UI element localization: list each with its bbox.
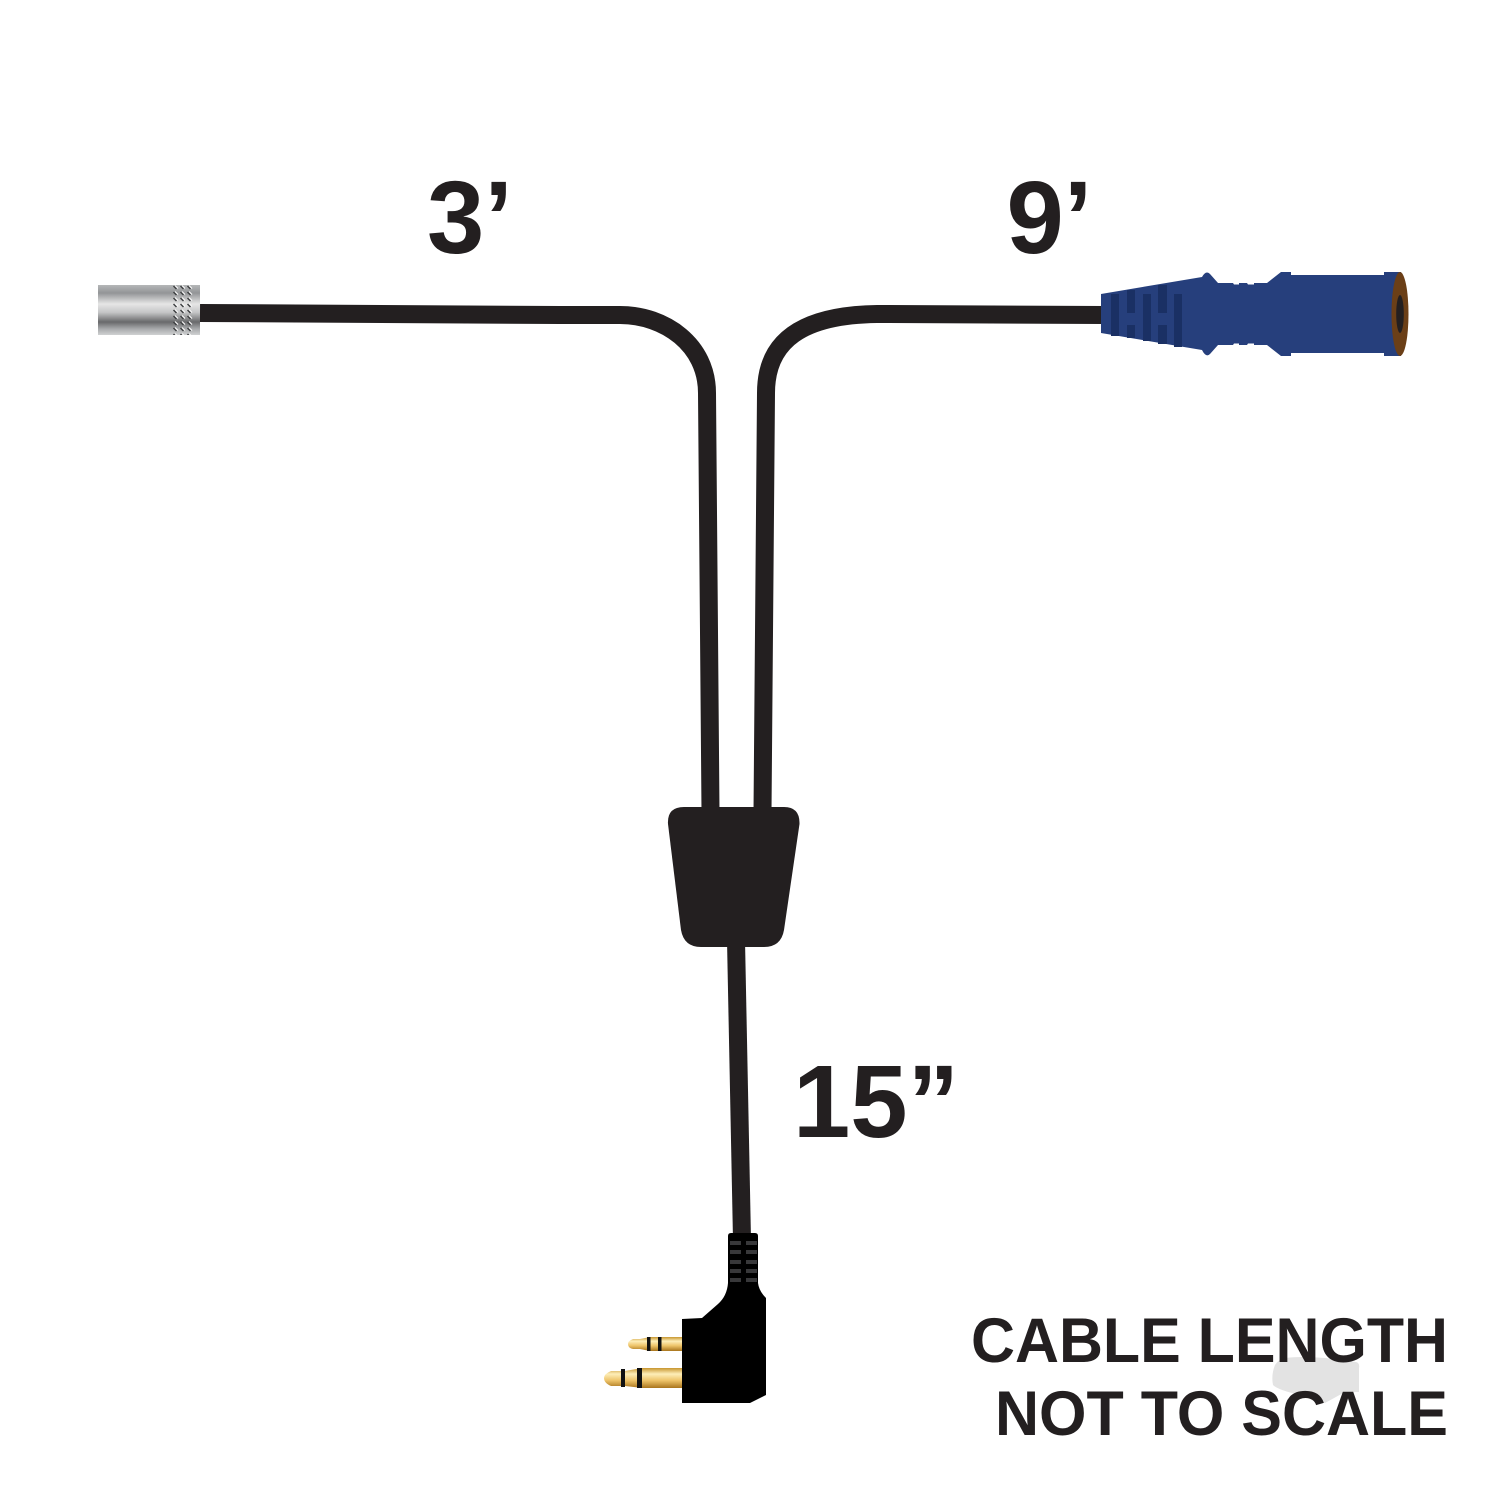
label: 15 inches: 15” [793, 1044, 959, 1159]
label: 9 feet: 9’ [1006, 160, 1092, 275]
note: cable length not to scale: NOT TO SCALE [995, 1379, 1448, 1449]
note: cable length not to scale: CABLE LENGTH [971, 1306, 1448, 1376]
cable: 9 foot branch [762, 314, 1104, 812]
note: cable length not to scale [971, 1306, 1448, 1449]
cable: 15 inch stem [736, 940, 742, 1240]
plug body [682, 1233, 766, 1403]
gold pin: upper [628, 1337, 682, 1351]
blue connector [1101, 272, 1408, 356]
right-angle plug [604, 1233, 766, 1403]
label: 3 feet: 3’ [427, 160, 513, 275]
cable: 3 foot branch [200, 313, 710, 812]
plug grip ribs [730, 1241, 757, 1282]
connector socket [1392, 272, 1408, 356]
gold pin: lower [604, 1368, 682, 1388]
silver connector [98, 285, 200, 335]
smudge behind note [1272, 1357, 1359, 1403]
Y splitter [668, 807, 800, 947]
